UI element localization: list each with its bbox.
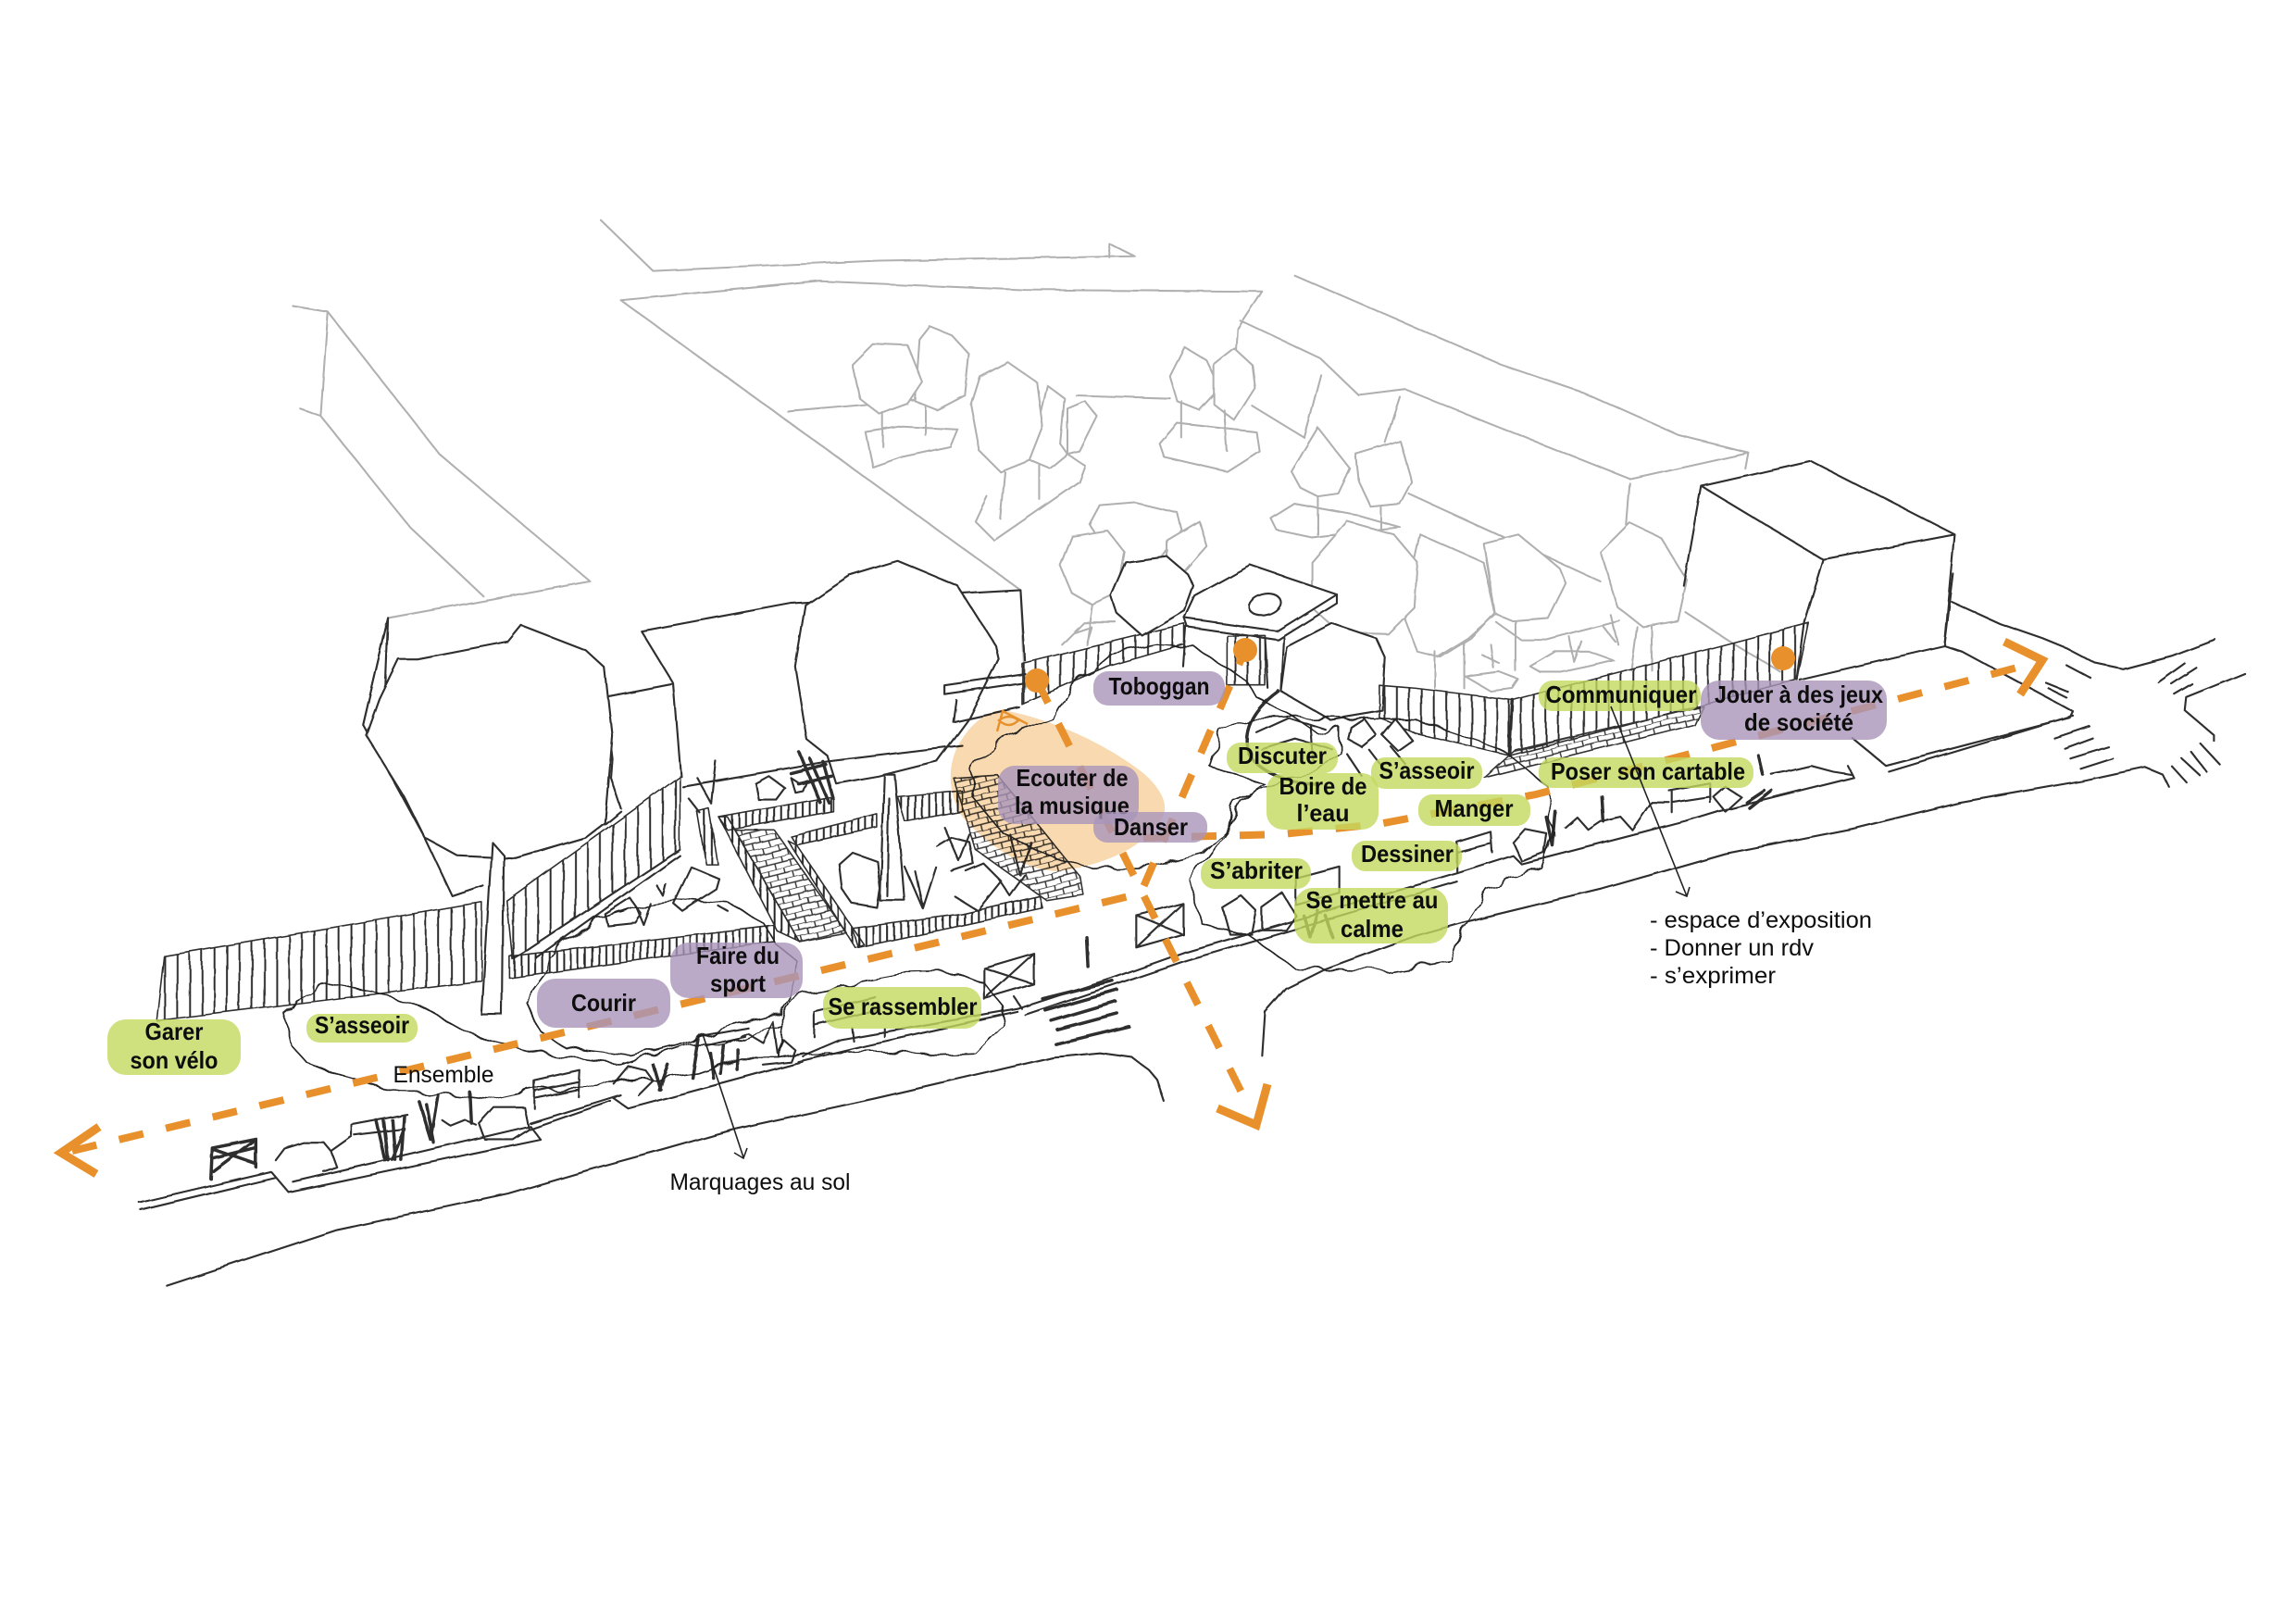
cloud: Se rassembler: [780, 972, 1003, 1058]
fence: rising diagonal fence: [506, 776, 680, 959]
label: Se mettre au calme: [1294, 886, 1448, 943]
label: Danser: Danser: [1114, 813, 1188, 841]
planter inner hatching: [1256, 718, 1405, 776]
cloud: Ensemble: [285, 984, 780, 1098]
fence: dense low fence: [509, 926, 775, 979]
label: Ecouter de la musique: [998, 764, 1139, 824]
crossing: right: [2045, 663, 2220, 782]
fence: east garden fence: [898, 791, 962, 821]
text: Marquages au sol: Marquages au sol: [670, 1169, 850, 1195]
tree: centre right: [1281, 624, 1385, 719]
building: front left block: [363, 618, 483, 896]
label: S'abriter: S’abriter: [1210, 856, 1303, 884]
dark plant behind garden: [791, 753, 833, 803]
bollard: [1087, 937, 1088, 967]
fence: front garden fence: [852, 896, 1042, 947]
building: front middle block: [506, 590, 1025, 858]
benches: [211, 783, 1710, 1179]
arrowhead: bottom: [1217, 1084, 1267, 1125]
label: Boire de l'eau: l’eau: [1296, 799, 1350, 827]
label: Danser: [1093, 812, 1207, 843]
road: lower long edge: [167, 1053, 1164, 1286]
road: right lower edge: [1853, 768, 2168, 829]
kiosk: opening: [1247, 591, 1283, 618]
plank: [527, 849, 680, 957]
text: exposition notes: - s’exprimer: [1650, 963, 1776, 989]
cloud: Courir and sport: [524, 899, 796, 1056]
paving: band right: [1485, 706, 1703, 778]
text: exposition notes: [1650, 907, 1872, 989]
text: exposition notes: - espace d’exposition: [1650, 907, 1872, 933]
sketch: background buildings and trees: [293, 219, 1780, 725]
bushes in bed: [1349, 719, 1413, 751]
arrow: dashed route left to centre then up: [72, 650, 1245, 1151]
icon: orange eye mark: [997, 711, 1028, 731]
paving: garden left path: [735, 831, 846, 942]
label: Toboggan: Toboggan: [1109, 672, 1209, 700]
bench: back: [944, 674, 1025, 722]
fence: mid garden fence: [791, 814, 877, 845]
dark post group: [697, 808, 718, 864]
fence: kiosk fence: [1227, 635, 1266, 685]
plants: triangle bed: [605, 761, 806, 926]
marker: orange dot 1: [1025, 668, 1049, 693]
label: Jouer à des jeux de société: Jouer à des jeux: [1715, 681, 1883, 708]
label: Garer son vélo: [107, 1018, 241, 1075]
wavy activity clouds: [285, 644, 1552, 1098]
label: Dessiner: Dessiner: [1361, 840, 1454, 868]
label: Se rassembler: Se rassembler: [828, 993, 978, 1020]
marker: orange dot 2: [1233, 638, 1257, 662]
label: S'asseoir left: S’asseoir: [315, 1011, 409, 1039]
tree: behind kiosk: [1111, 556, 1193, 635]
fence: right long fence: [1379, 622, 1808, 756]
label: Se mettre au calme: calme: [1341, 915, 1404, 943]
label: Communiquer: Communiquer: [1546, 681, 1696, 708]
tree: large tree centre: [795, 561, 999, 783]
label: Faire du sport: [670, 942, 803, 998]
label: S'asseoir right: S’asseoir: [1379, 756, 1474, 784]
tree: large tree left: [366, 625, 612, 858]
label: Poser son cartable: Poser son cartable: [1551, 757, 1745, 785]
trunk: [481, 842, 504, 1015]
arrow: to exposition notes: [1611, 706, 1690, 896]
platform: right: [1853, 574, 2074, 772]
label: Jouer à des jeux de société: [1701, 681, 1887, 740]
planting row along the kerb: [275, 756, 1853, 1171]
fence: long left fence: [156, 902, 481, 1020]
plants: garden: [839, 775, 1030, 911]
trees: rear groves: [852, 327, 1780, 692]
label: Boire de l'eau: Boire de: [1279, 772, 1366, 800]
label: Ecouter de la musique: Ecouter de: [1017, 764, 1128, 792]
kiosk: roof edge and posts: [1183, 594, 1337, 692]
building: left grey block: [293, 306, 590, 725]
label: Garer son vélo: Garer: [144, 1018, 204, 1045]
label: Manger: Manger: [1435, 794, 1513, 822]
fence post at angle: [1510, 700, 1513, 756]
fence: back centre fence: [1022, 624, 1185, 705]
curb: street kerb: [139, 766, 1853, 1209]
crossing: centre: [1042, 981, 1129, 1044]
fence: path east edge: [788, 841, 864, 947]
label: Courir: Courir: [571, 989, 636, 1017]
arrow: dashed route to bottom: [1037, 681, 1250, 1109]
marker: orange dot 3: [1771, 646, 1795, 670]
planter: round bed: [1247, 692, 1317, 783]
label: Garer son vélo: son vélo: [130, 1046, 218, 1074]
fence: top garden fence: [719, 796, 833, 831]
arrowhead: right: [2004, 642, 2042, 694]
label: Manger: [1418, 794, 1530, 826]
road: top right corner: [1952, 602, 2245, 741]
arrow: dashed route to right: [1143, 664, 2031, 838]
road: lower right edge: [1262, 829, 1853, 1056]
building: right grey long block: [1241, 275, 1748, 581]
text: Ensemble: Ensemble: [393, 1062, 494, 1088]
cloud: calm and chat: [1191, 718, 1552, 971]
label: Courir: [537, 979, 670, 1028]
orange zone: [951, 710, 1165, 871]
label: Se rassembler: [823, 987, 981, 1029]
building: rear grey block with roof arrow: [600, 219, 1262, 688]
text: exposition notes: - Donner un rdv: [1650, 935, 1815, 961]
arrow: to Marquages au sol: [703, 1034, 747, 1158]
label: Jouer à des jeux de société: de société: [1744, 708, 1853, 736]
paving: right terrace under orange zone: [954, 775, 1083, 901]
ground line behind garden: [682, 745, 962, 786]
kiosk: roof with opening: [1185, 565, 1337, 631]
label: Discuter: Discuter: [1238, 742, 1327, 769]
label: Ecouter de la musique: la musique: [1015, 792, 1129, 819]
building: black corner block right: [1684, 461, 1954, 680]
label: Se mettre au calme: Se mettre au: [1305, 886, 1439, 914]
arrowhead: left: [61, 1127, 99, 1174]
sketch: foreground street and garden: [139, 461, 2245, 1286]
label: Faire du sport: Faire du: [696, 942, 780, 969]
label: Boire de l'eau: [1267, 772, 1379, 830]
label: Faire du sport: sport: [710, 969, 766, 997]
fence: path west edge: [719, 818, 800, 942]
cloud: Toboggan and music: [972, 644, 1340, 868]
